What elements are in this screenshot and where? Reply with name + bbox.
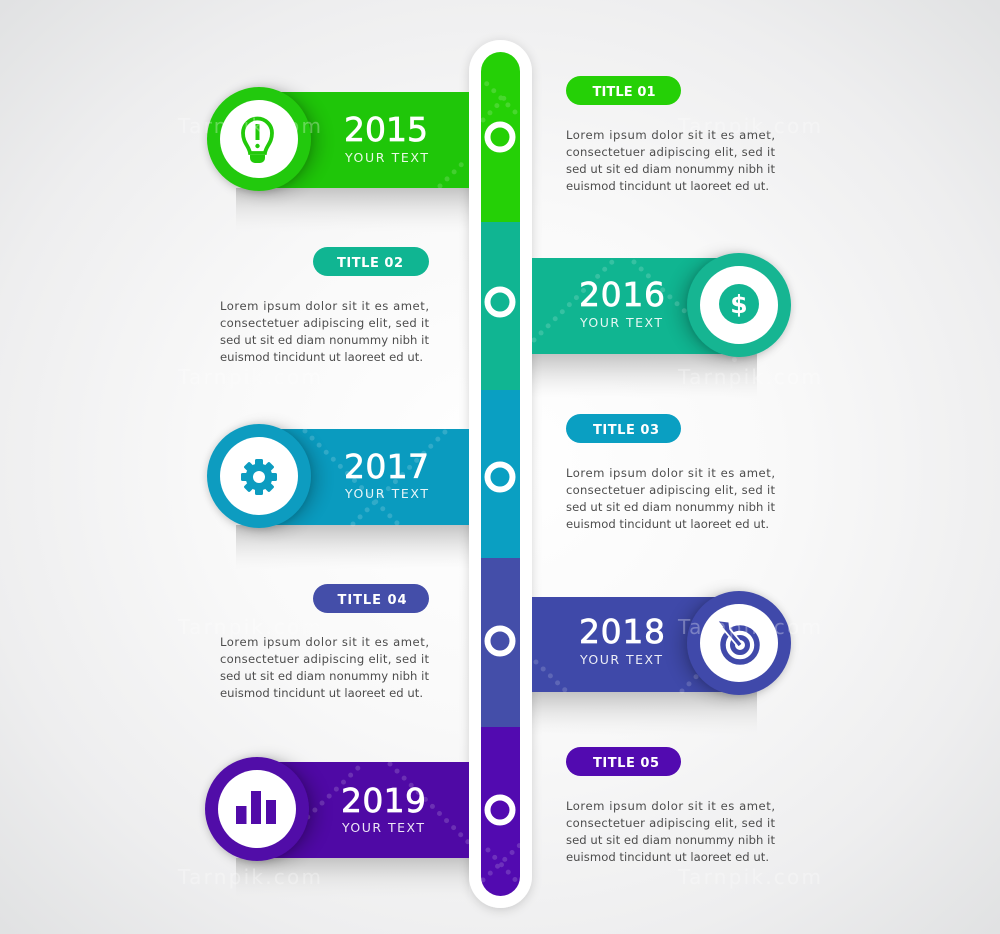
icon: dollar coin: $: [730, 290, 748, 319]
text block 04: sed ut sit ed diam nonummy nibh it: [220, 669, 429, 683]
watermarks: Tarnpik.com: [677, 865, 821, 889]
badge: [687, 253, 791, 357]
year: 2015: [344, 110, 428, 149]
milestone 2018: [532, 591, 791, 697]
band shadows: [236, 188, 757, 902]
year: 2019: [341, 781, 426, 820]
watermarks: Tarnpik.com: [177, 865, 321, 889]
milestone 2017: [207, 424, 469, 530]
text block 05: sed ut sit ed diam nonummy nibh it: [566, 833, 775, 847]
title pill 03: [566, 414, 681, 443]
badge: [207, 424, 311, 528]
text block 01: sed ut sit ed diam nonummy nibh it: [566, 162, 775, 176]
year: 2018: [579, 612, 665, 651]
watermarks: Tarnpik.com: [677, 615, 821, 639]
sublabel: YOUR TEXT: [579, 652, 662, 667]
text block 02: Lorem ipsum dolor sit it es amet,: [220, 299, 429, 313]
sublabel: YOUR TEXT: [344, 150, 428, 165]
title pill 01: TITLE 01: [592, 85, 656, 100]
watermarks: Tarnpik.com: [177, 365, 321, 389]
text block 03: Lorem ipsum dolor sit it es amet,: [566, 466, 775, 480]
icon: light bulb: [243, 118, 272, 163]
text block 01: Lorem ipsum dolor sit it es amet,: [566, 128, 775, 142]
watermarks: [177, 114, 821, 889]
watermarks: Tarnpik.com: [677, 114, 821, 138]
year: 2017: [344, 447, 429, 486]
watermarks: Tarnpik.com: [177, 114, 321, 138]
title pill 02: TITLE 02: [337, 256, 403, 271]
sublabel: YOUR TEXT: [344, 486, 428, 501]
sublabel: YOUR TEXT: [341, 820, 424, 835]
badge: [687, 591, 791, 695]
year: 2016: [579, 275, 665, 314]
icon: dollar coin: [719, 284, 759, 324]
title pill 04: [313, 584, 429, 613]
bar white casing: [469, 40, 532, 908]
badge: [205, 757, 309, 861]
title pill 01: [566, 76, 681, 105]
badge: [207, 87, 311, 191]
text block 03: consectetuer adipiscing elit, sed it: [566, 483, 775, 497]
text block 04: Lorem ipsum dolor sit it es amet,: [220, 635, 429, 649]
title pill 04: TITLE 04: [338, 593, 406, 608]
text block 04: euismod tincidunt ut laoreet ed ut.: [220, 686, 423, 700]
text block 02: [220, 299, 429, 364]
title pill 02: [313, 247, 429, 276]
text block 02: sed ut sit ed diam nonummy nibh it: [220, 333, 429, 347]
text block 05: consectetuer adipiscing elit, sed it: [566, 816, 775, 830]
timeline rings: [488, 124, 512, 822]
milestone 2016: [532, 253, 791, 360]
sublabel: YOUR TEXT: [579, 315, 662, 330]
title pill 03: TITLE 03: [593, 423, 659, 438]
text block 01: euismod tincidunt ut laoreet ed ut.: [566, 179, 769, 193]
milestone 2019: [205, 757, 469, 863]
text block 04: consectetuer adipiscing elit, sed it: [220, 652, 429, 666]
text block 02: consectetuer adipiscing elit, sed it: [220, 316, 429, 330]
bar colour segments: [481, 52, 520, 896]
text block 05: euismod tincidunt ut laoreet ed ut.: [566, 850, 769, 864]
icon: target: [720, 622, 757, 662]
watermarks: Tarnpik.com: [677, 365, 821, 389]
text block 05: [566, 799, 775, 864]
text block 01: consectetuer adipiscing elit, sed it: [566, 145, 775, 159]
title pill 05: [566, 747, 681, 776]
icon: gear: [241, 459, 277, 495]
icon: bar chart: [236, 791, 276, 824]
text block 04: [220, 635, 429, 700]
text block 01: [566, 128, 775, 193]
text block 03: sed ut sit ed diam nonummy nibh it: [566, 500, 775, 514]
text block 03: euismod tincidunt ut laoreet ed ut.: [566, 517, 769, 531]
text block 05: Lorem ipsum dolor sit it es amet,: [566, 799, 775, 813]
text block 02: euismod tincidunt ut laoreet ed ut.: [220, 350, 423, 364]
timeline bar: [469, 40, 532, 908]
watermarks: Tarnpik.com: [177, 615, 321, 639]
milestone 2015: [207, 87, 469, 193]
text block 03: [566, 466, 775, 531]
title pill 05: TITLE 05: [593, 756, 659, 771]
